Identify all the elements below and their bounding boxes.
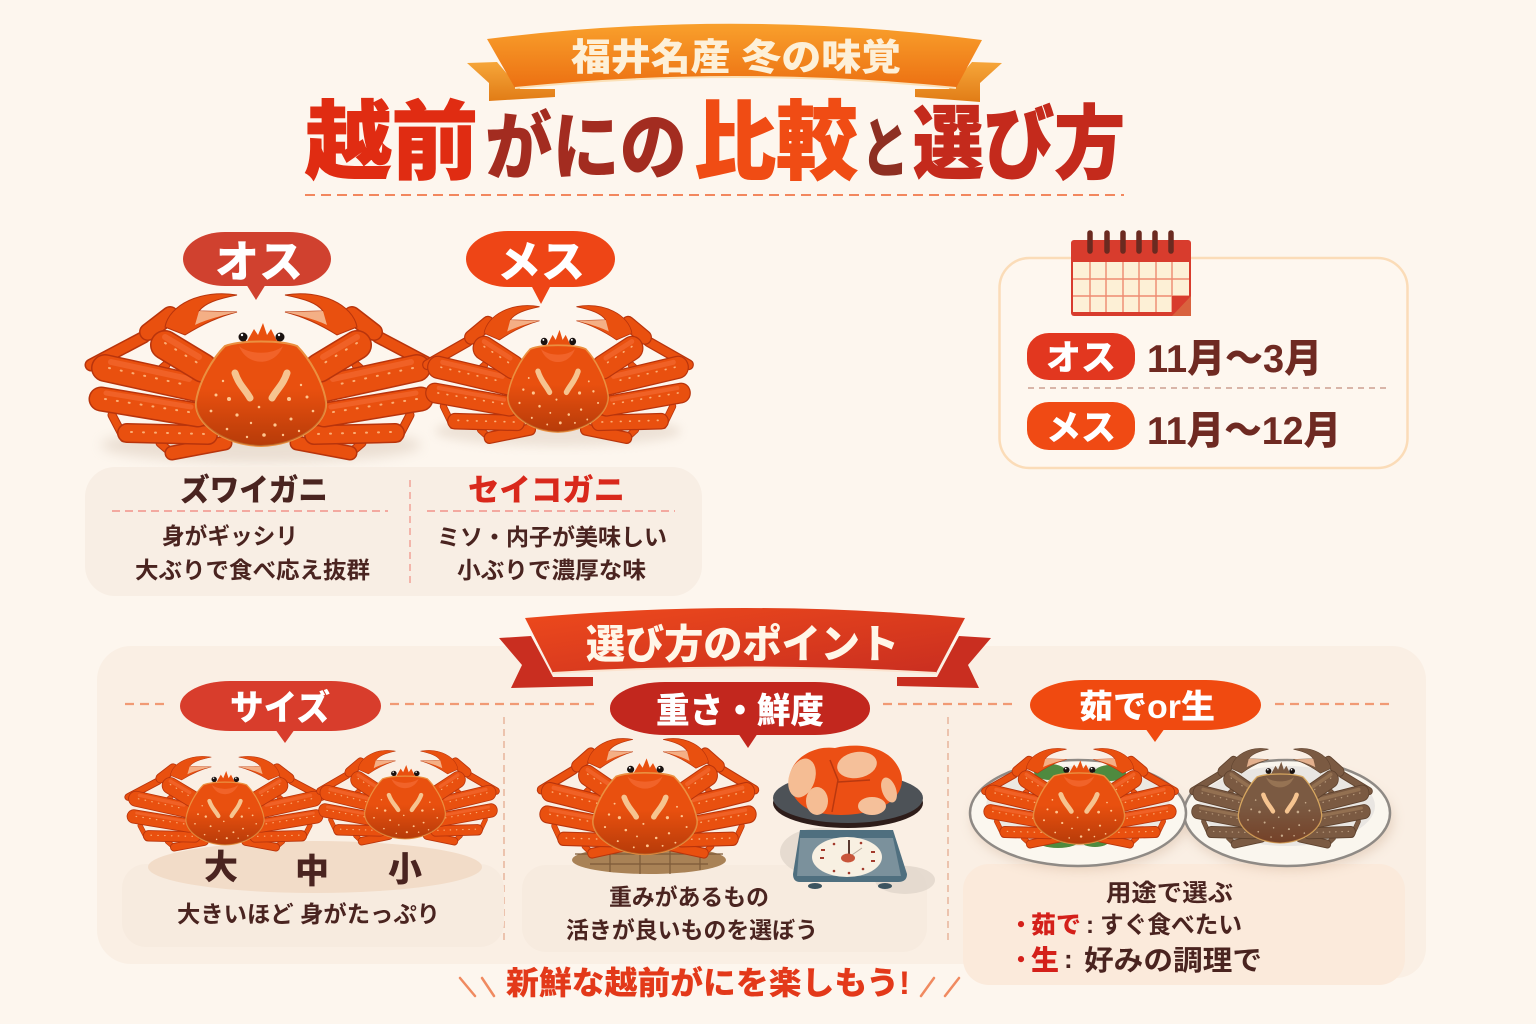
male column: 大ぶりで食べ応え抜群 bbox=[135, 557, 370, 583]
crab: male bbox=[91, 294, 431, 463]
bubble: size bbox=[180, 681, 381, 743]
female season: 11月～12月 bbox=[1147, 410, 1341, 453]
crab: female bbox=[427, 306, 689, 446]
female column bbox=[427, 473, 675, 583]
title: がにの bbox=[485, 106, 687, 189]
bubble: weight freshness: 重さ・鮮度 bbox=[656, 692, 824, 731]
male column: 身がギッシリ bbox=[162, 523, 298, 549]
card: boiled or raw: ・ bbox=[1009, 947, 1033, 974]
bubble: boiled or raw bbox=[1030, 680, 1261, 742]
boiled crab bbox=[985, 748, 1175, 845]
section ribbon bbox=[499, 608, 991, 688]
card: weight bbox=[522, 865, 927, 952]
size labels: 中 bbox=[295, 853, 329, 891]
male column bbox=[112, 473, 388, 583]
bubble: male: オス bbox=[215, 238, 303, 287]
bubble: size: サイズ bbox=[230, 688, 330, 728]
plates and crabs: boiled and raw bbox=[970, 748, 1393, 870]
male season: 11月～3月 bbox=[1147, 338, 1322, 381]
card: boiled or raw: 生 bbox=[1031, 945, 1059, 976]
card: weight: 重みがあるもの bbox=[609, 884, 769, 910]
card: boiled or raw: ・ bbox=[1009, 912, 1033, 939]
crabs: size comparison bbox=[128, 750, 496, 848]
size labels: 小 bbox=[388, 851, 422, 889]
bubble: female bbox=[466, 231, 615, 304]
icon: calendar bbox=[1071, 233, 1191, 316]
male season: オス bbox=[1046, 339, 1116, 378]
card: boiled or raw: : bbox=[1064, 944, 1073, 974]
card: boiled or raw: 好みの調理で bbox=[1084, 945, 1262, 976]
bubble: female: メス bbox=[497, 238, 585, 287]
male column: ズワイガニ bbox=[180, 473, 328, 508]
ribbon text: 福井名産 冬の味覚 bbox=[571, 37, 901, 78]
panel: comparison bbox=[85, 467, 702, 596]
female column: 小ぶりで濃厚な味 bbox=[457, 557, 646, 583]
title: 選び方 bbox=[913, 100, 1125, 189]
bubble: boiled or raw: 茹でor生 bbox=[1079, 688, 1215, 725]
card: boiled or raw: すぐ食べたい bbox=[1100, 912, 1242, 939]
size labels bbox=[204, 849, 422, 891]
raw crab bbox=[1193, 748, 1369, 845]
card: boiled or raw: : bbox=[1086, 912, 1094, 939]
female season: メス bbox=[1046, 409, 1116, 448]
title bbox=[305, 95, 1125, 191]
title: 比較 bbox=[694, 95, 858, 191]
basket and crab: heavy bbox=[541, 739, 755, 874]
card: boiled or raw: 用途で選ぶ bbox=[1106, 880, 1233, 907]
female column: ミソ・内子が美味しい bbox=[437, 524, 667, 550]
card: size: 大きいほど 身がたっぷり bbox=[177, 901, 440, 927]
bubble: male bbox=[183, 232, 331, 300]
card: weight: 活きが良いものを選ぼう bbox=[566, 917, 818, 943]
card: boiled or raw bbox=[963, 864, 1405, 985]
closing message: 新鮮な越前がにを楽しもう! bbox=[506, 965, 910, 1001]
ribbon text: 選び方のポイント bbox=[586, 623, 899, 667]
title: と bbox=[861, 112, 909, 186]
header ribbon bbox=[467, 24, 1002, 102]
panel: selection points bbox=[97, 646, 1426, 985]
bubble: weight freshness bbox=[610, 682, 870, 748]
size labels: 大 bbox=[204, 849, 238, 887]
female column: セイコガニ bbox=[468, 473, 625, 508]
icon: scale with crab meat bbox=[773, 746, 935, 894]
panel: season calendar bbox=[1000, 233, 1408, 468]
male season bbox=[1027, 333, 1322, 381]
card: boiled or raw: 茹で bbox=[1031, 912, 1081, 939]
title: 越前 bbox=[305, 95, 478, 191]
female season bbox=[1027, 402, 1341, 453]
card: size bbox=[122, 841, 504, 947]
